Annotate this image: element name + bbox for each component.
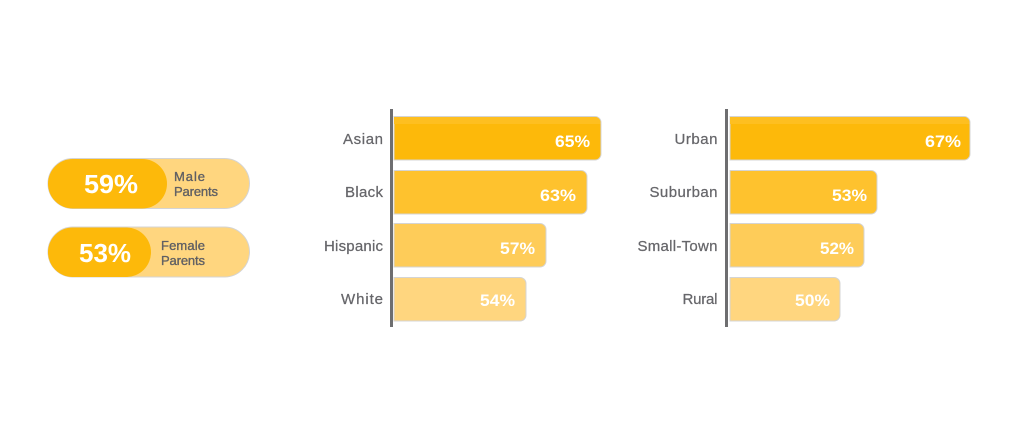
bar: Rural 50% [682, 278, 840, 321]
pill: female parents [48, 227, 250, 277]
bar: Small-Town 52% [638, 224, 864, 267]
bar: Black 63%: Black [345, 184, 384, 201]
bar: White 54%: 54% [480, 291, 515, 310]
bar: Suburban 53%: 53% [832, 186, 867, 205]
bar: White 54% [341, 278, 526, 321]
bar: Small-Town 52%: 52% [820, 239, 854, 258]
pill: male parents: Parents [174, 184, 218, 199]
bar: Asian 65%: Asian [343, 131, 383, 148]
bar: Asian 65% [343, 116, 601, 160]
axis line: community [725, 109, 728, 327]
bar: Suburban 53%: Suburban [650, 184, 718, 201]
bar: Rural 50%: 50% [795, 291, 830, 310]
bar: Hispanic 57% [324, 224, 546, 267]
pill: female parents: Parents [161, 253, 206, 268]
bar: Urban 67%: 67% [925, 132, 961, 151]
bar: Black 63% [345, 170, 587, 214]
bar: Asian 65%: 65% [555, 132, 590, 151]
pill: female parents: 53% [79, 238, 131, 268]
pill: female parents: Female [161, 238, 205, 253]
bar: Urban 67% [674, 116, 970, 160]
bar: Hispanic 57%: Hispanic [324, 238, 384, 255]
bar: Black 63%: 63% [540, 186, 576, 205]
bar: Rural 50%: Rural [682, 291, 718, 308]
bar chart: by community [638, 109, 970, 327]
panel: parents by gender [48, 158, 250, 277]
bar: Urban 67%: Urban [674, 131, 718, 148]
pill: male parents: Male [174, 169, 205, 184]
bar: Small-Town 52%: Small-Town [638, 238, 718, 255]
bar: Hispanic 57%: 57% [500, 239, 535, 258]
bar chart: by race [324, 109, 601, 327]
pill: male parents: 59% [84, 169, 138, 199]
pill: male parents [48, 158, 250, 208]
bar: White 54%: White [341, 291, 383, 308]
axis line: race [390, 109, 393, 327]
bar: Suburban 53% [650, 170, 877, 214]
